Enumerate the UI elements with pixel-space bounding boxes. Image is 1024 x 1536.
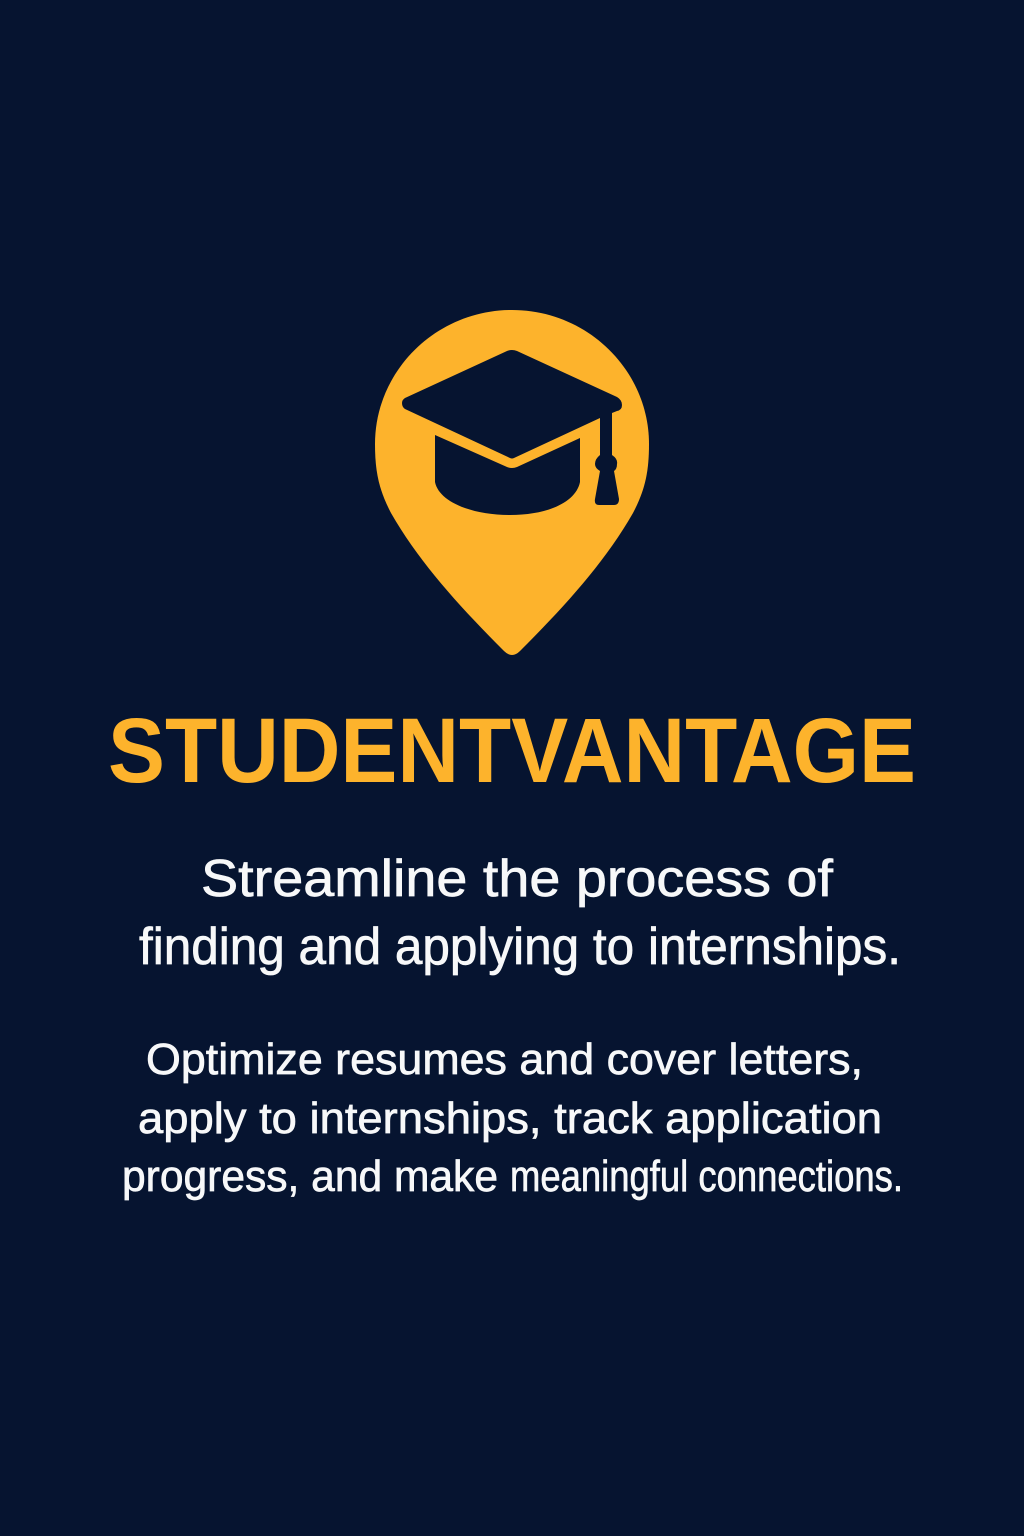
description: meaningful connections. xyxy=(510,1152,903,1201)
graduation cap board xyxy=(402,350,622,505)
description xyxy=(122,1035,903,1201)
pin shape xyxy=(375,310,649,655)
subtitle xyxy=(139,850,901,976)
graduation cap base xyxy=(435,435,580,515)
title: STUDENTVANTAGE xyxy=(108,700,916,802)
description: progress, and make xyxy=(122,1152,498,1201)
subtitle: finding and applying to internships. xyxy=(139,918,901,976)
icon: map pin with graduation cap xyxy=(375,310,649,655)
description: Optimize resumes and cover letters, xyxy=(146,1035,863,1084)
subtitle: Streamline the process of xyxy=(201,850,834,908)
description: apply to internships, track application xyxy=(138,1094,882,1143)
